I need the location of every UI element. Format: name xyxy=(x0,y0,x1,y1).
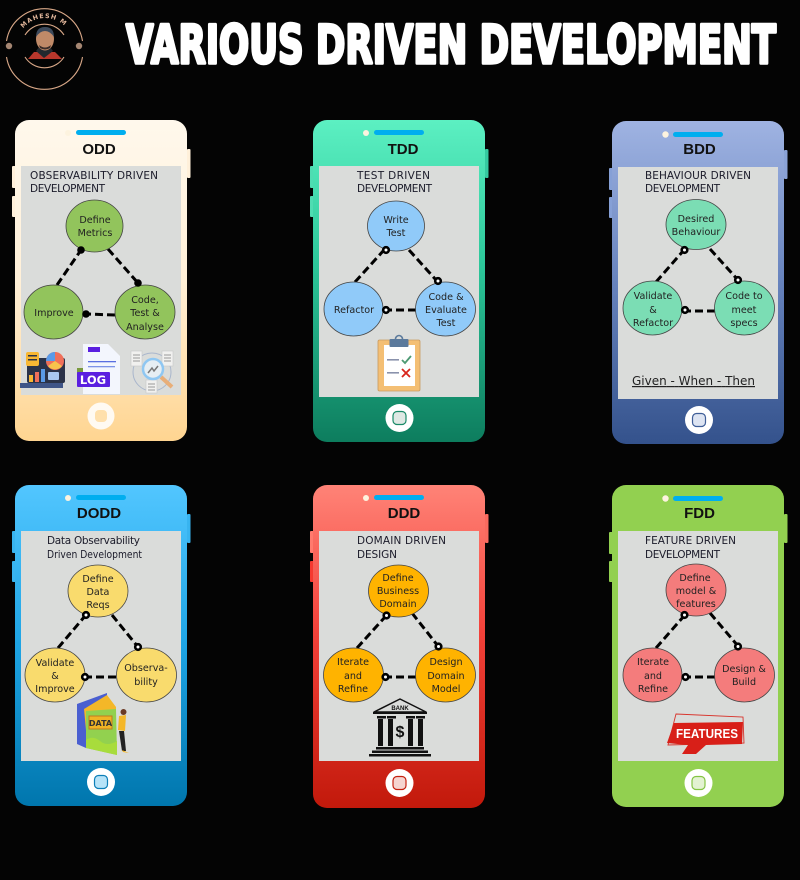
cycle diagram: DODD: Improve xyxy=(35,684,75,695)
cycle diagram: FDD: Iterate xyxy=(637,657,669,668)
cycle diagram: DDD: Domain xyxy=(427,671,465,682)
cycle diagram: DDD: Define xyxy=(382,573,414,584)
cycle diagram: DODD: Define xyxy=(82,574,114,585)
cycle diagram: TDD: Test xyxy=(386,228,406,239)
icon: dashboard charts xyxy=(20,352,65,388)
heading: DDD full name: DESIGN xyxy=(357,549,397,561)
home button: DODD xyxy=(87,768,115,796)
icon: features banner: FEATURES xyxy=(676,727,738,741)
cycle diagram: DODD xyxy=(25,565,176,702)
label: DDD: DDD xyxy=(388,505,420,522)
cycle diagram: TDD: Evaluate xyxy=(425,305,467,316)
icon: log file xyxy=(77,344,120,394)
cycle diagram: FDD: Build xyxy=(732,677,756,688)
cycle diagram: DODD: Observa- xyxy=(124,663,168,674)
cycle diagram: TDD: Code & xyxy=(428,292,464,303)
text: Given When Then: Given - When - Then xyxy=(632,374,755,388)
cycle diagram: ODD: Define xyxy=(79,215,111,226)
cycle diagram: FDD: Define xyxy=(679,573,711,584)
icon: bank building: BANK xyxy=(391,706,409,712)
cycle diagram: DDD: and xyxy=(344,671,362,682)
cycle diagram: DODD: Reqs xyxy=(86,600,110,611)
cycle diagram: ODD: Analyse xyxy=(126,322,164,333)
heading: BDD full name: BEHAVIOUR DRIVEN xyxy=(645,170,751,182)
cycle diagram: TDD: Write xyxy=(383,215,409,226)
cycle diagram: FDD: Design & xyxy=(722,664,766,675)
heading: FDD full name: DEVELOPMENT xyxy=(645,549,721,561)
phone: BDD xyxy=(609,121,788,444)
icon: data book with person xyxy=(77,693,129,755)
cycle diagram: FDD: model & xyxy=(676,586,717,597)
cycle diagram: BDD: Validate xyxy=(634,291,672,302)
cycle diagram: FDD: Refine xyxy=(638,684,668,695)
icon: data book with person: DATA xyxy=(89,719,113,728)
heading: ODD full name: OBSERVABILITY DRIVEN xyxy=(30,170,158,182)
phone: TDD xyxy=(310,120,488,442)
cycle diagram: BDD: Desired xyxy=(678,214,714,225)
cycle diagram: BDD: & xyxy=(649,305,657,316)
cycle diagram: ODD: Metrics xyxy=(78,228,112,239)
home button: ODD xyxy=(88,402,114,430)
cycle diagram: BDD: Behaviour xyxy=(672,227,720,238)
phone: FDD xyxy=(609,485,788,807)
icon: bank building: $ xyxy=(396,724,405,741)
cycle diagram: DDD: Business xyxy=(377,586,419,597)
logo: Mahesh M badge: MAHESH M xyxy=(20,13,67,28)
cycle diagram: TDD: Test xyxy=(436,318,456,329)
cycle diagram: DDD: Refine xyxy=(338,684,368,695)
cycle diagram: FDD: and xyxy=(644,671,662,682)
icon: clipboard checklist xyxy=(378,336,420,391)
cycle diagram: BDD: Code to xyxy=(725,291,763,302)
label: ODD: ODD xyxy=(82,141,116,158)
heading: DODD full name: Driven Development xyxy=(47,549,142,561)
cycle diagram: BDD xyxy=(623,200,774,335)
heading: TDD full name: DEVELOPMENT xyxy=(357,183,433,195)
label: TDD: TDD xyxy=(388,141,419,158)
icon: features banner xyxy=(667,714,744,754)
heading: BDD full name: DEVELOPMENT xyxy=(645,183,721,195)
cycle diagram: ODD: Improve xyxy=(34,308,74,319)
label: FDD: FDD xyxy=(684,505,715,522)
icon: log file: LOG xyxy=(80,373,106,387)
home button: TDD xyxy=(386,404,414,432)
cycle diagram: DDD xyxy=(324,565,476,702)
cycle diagram: BDD: specs xyxy=(730,318,758,329)
cycle diagram: DODD: bility xyxy=(134,677,158,688)
phone: DODD xyxy=(12,485,190,806)
label: DODD: DODD xyxy=(77,505,121,522)
phone: DDD xyxy=(310,485,488,808)
heading: DDD full name: DOMAIN DRIVEN xyxy=(357,535,446,547)
cycle diagram: TDD: Refactor xyxy=(334,305,374,316)
cycle diagram: BDD: meet xyxy=(732,305,757,316)
icon: bank building xyxy=(369,699,431,756)
home button: BDD xyxy=(685,406,713,434)
cycle diagram: ODD: Test & xyxy=(129,308,160,319)
icon: analysis magnifier xyxy=(131,351,173,393)
cycle diagram: DDD: Iterate xyxy=(337,657,369,668)
heading: FDD full name: FEATURE DRIVEN xyxy=(645,535,736,547)
home button: DDD xyxy=(386,769,414,797)
cycle diagram: DODD: Validate xyxy=(36,658,74,669)
phone: ODD xyxy=(12,120,190,441)
logo: Mahesh M badge xyxy=(6,8,83,90)
label: BDD: BDD xyxy=(683,141,716,158)
cycle diagram: BDD: Refactor xyxy=(633,318,673,329)
heading: DODD full name: Data Observability xyxy=(47,535,140,547)
cycle diagram: DDD: Domain xyxy=(379,599,417,610)
cycle diagram: DODD: & xyxy=(51,671,59,682)
cycle diagram: DODD: Data xyxy=(87,587,109,598)
cycle diagram: TDD xyxy=(324,201,476,336)
cycle diagram: DDD: Design xyxy=(429,657,463,668)
cycle diagram: FDD: features xyxy=(676,599,716,610)
cycle diagram: ODD xyxy=(24,200,175,339)
cycle diagram: ODD: Code, xyxy=(131,295,159,306)
cycle diagram: DDD: Model xyxy=(432,684,460,695)
home button: FDD xyxy=(684,769,712,797)
cycle diagram: FDD xyxy=(623,564,774,702)
heading: ODD full name: DEVELOPMENT xyxy=(30,183,106,195)
heading: TDD full name: TEST DRIVEN xyxy=(356,170,430,182)
